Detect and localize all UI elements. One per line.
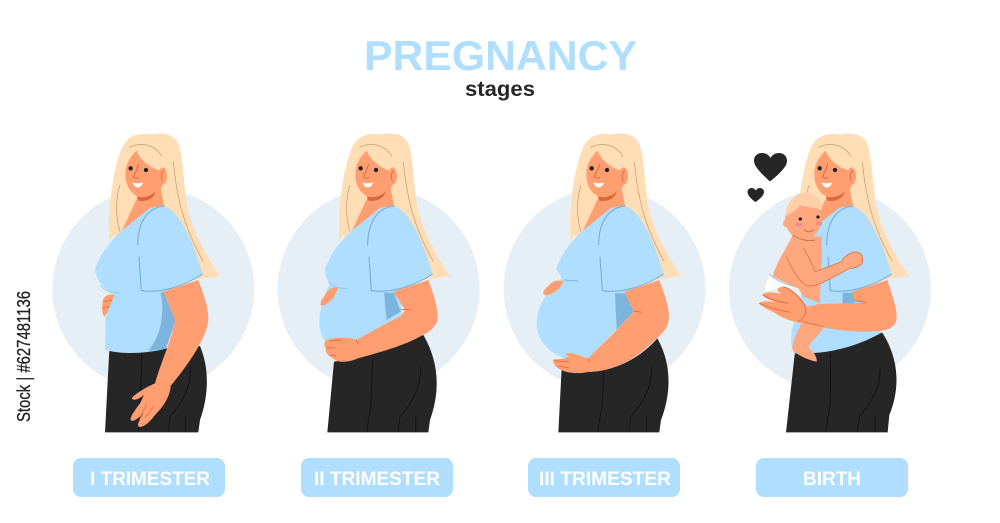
woman: third trimester bbox=[537, 133, 681, 432]
background circle 1 bbox=[52, 188, 254, 390]
label: birth: BIRTH bbox=[803, 468, 861, 490]
label: III trimester bbox=[528, 458, 680, 497]
woman: second trimester bbox=[319, 133, 450, 432]
baby bbox=[765, 193, 863, 362]
label: I trimester bbox=[73, 458, 225, 497]
subtitle: stages bbox=[465, 78, 535, 101]
stock id: Stock | #627481136 bbox=[14, 291, 34, 422]
title: PREGNANCY bbox=[364, 32, 637, 79]
background circle 3 bbox=[504, 188, 706, 390]
panel: third trimester illustration bbox=[504, 133, 706, 432]
mother's hand bbox=[759, 287, 820, 325]
panel: first trimester illustration bbox=[52, 133, 254, 432]
woman holding baby bbox=[759, 133, 909, 432]
label: I trimester: I TRIMESTER bbox=[90, 468, 210, 490]
background circle 4 bbox=[729, 188, 931, 390]
woman: first trimester bbox=[95, 133, 220, 432]
label: II trimester: II TRIMESTER bbox=[314, 468, 440, 490]
panel: birth illustration bbox=[729, 133, 931, 432]
label: II trimester bbox=[301, 458, 453, 497]
label: birth bbox=[756, 458, 908, 497]
icon: large heart bbox=[754, 153, 787, 182]
panel: second trimester illustration bbox=[278, 133, 480, 432]
background circle 2 bbox=[278, 188, 480, 390]
icon: small heart bbox=[748, 188, 764, 202]
label: III trimester: III TRIMESTER bbox=[539, 468, 671, 490]
